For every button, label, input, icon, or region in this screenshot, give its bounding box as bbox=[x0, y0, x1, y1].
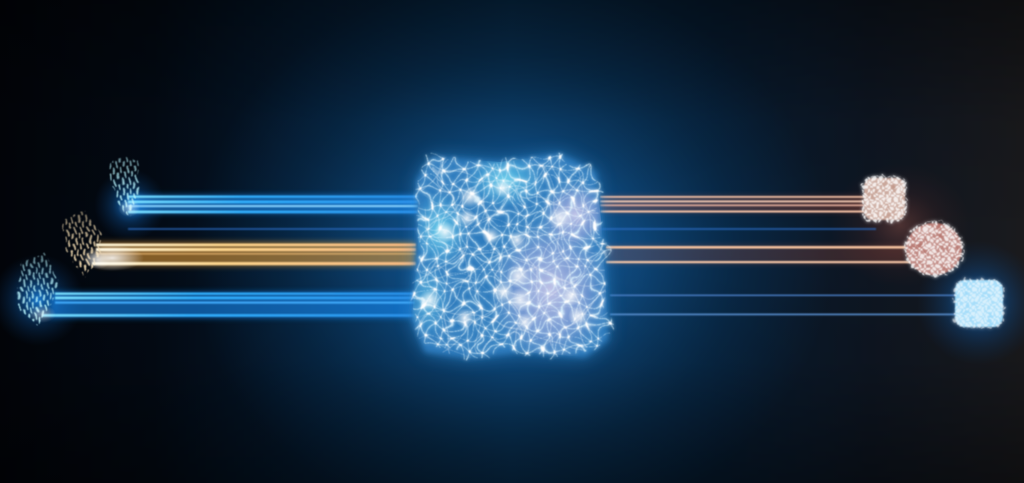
glow behind right blue cube bbox=[917, 241, 1024, 365]
glow behind left blue source 3 bbox=[0, 254, 84, 346]
faint centre beam bbox=[128, 228, 876, 230]
left beam group: top blue bbox=[128, 195, 418, 213]
right beam group: top peach bbox=[600, 196, 865, 212]
network outer glow bbox=[412, 154, 608, 358]
network mesh coarse bbox=[417, 160, 603, 353]
network bright nodes bbox=[419, 178, 588, 331]
right output: peach square bbox=[862, 176, 907, 222]
central network block bbox=[406, 152, 612, 365]
glow behind right peach shapes bbox=[830, 163, 970, 287]
left source: blue fan bottom bbox=[17, 253, 58, 325]
network colour patches bbox=[412, 159, 606, 356]
network body fill bbox=[412, 154, 608, 358]
right output: red-peach round blob bbox=[904, 221, 964, 277]
glow behind left blue source 1 bbox=[94, 169, 166, 241]
right beam group: blue bbox=[610, 294, 956, 315]
left source: amber fan middle bbox=[62, 210, 111, 277]
right output: light blue square bbox=[954, 279, 1004, 328]
left source: blue fan top bbox=[107, 156, 140, 217]
left beam group: yellow bbox=[80, 242, 416, 271]
left beam group: bottom blue bbox=[42, 292, 415, 318]
network mesh fine bbox=[412, 154, 608, 358]
right beam group: middle peach bbox=[606, 245, 911, 264]
